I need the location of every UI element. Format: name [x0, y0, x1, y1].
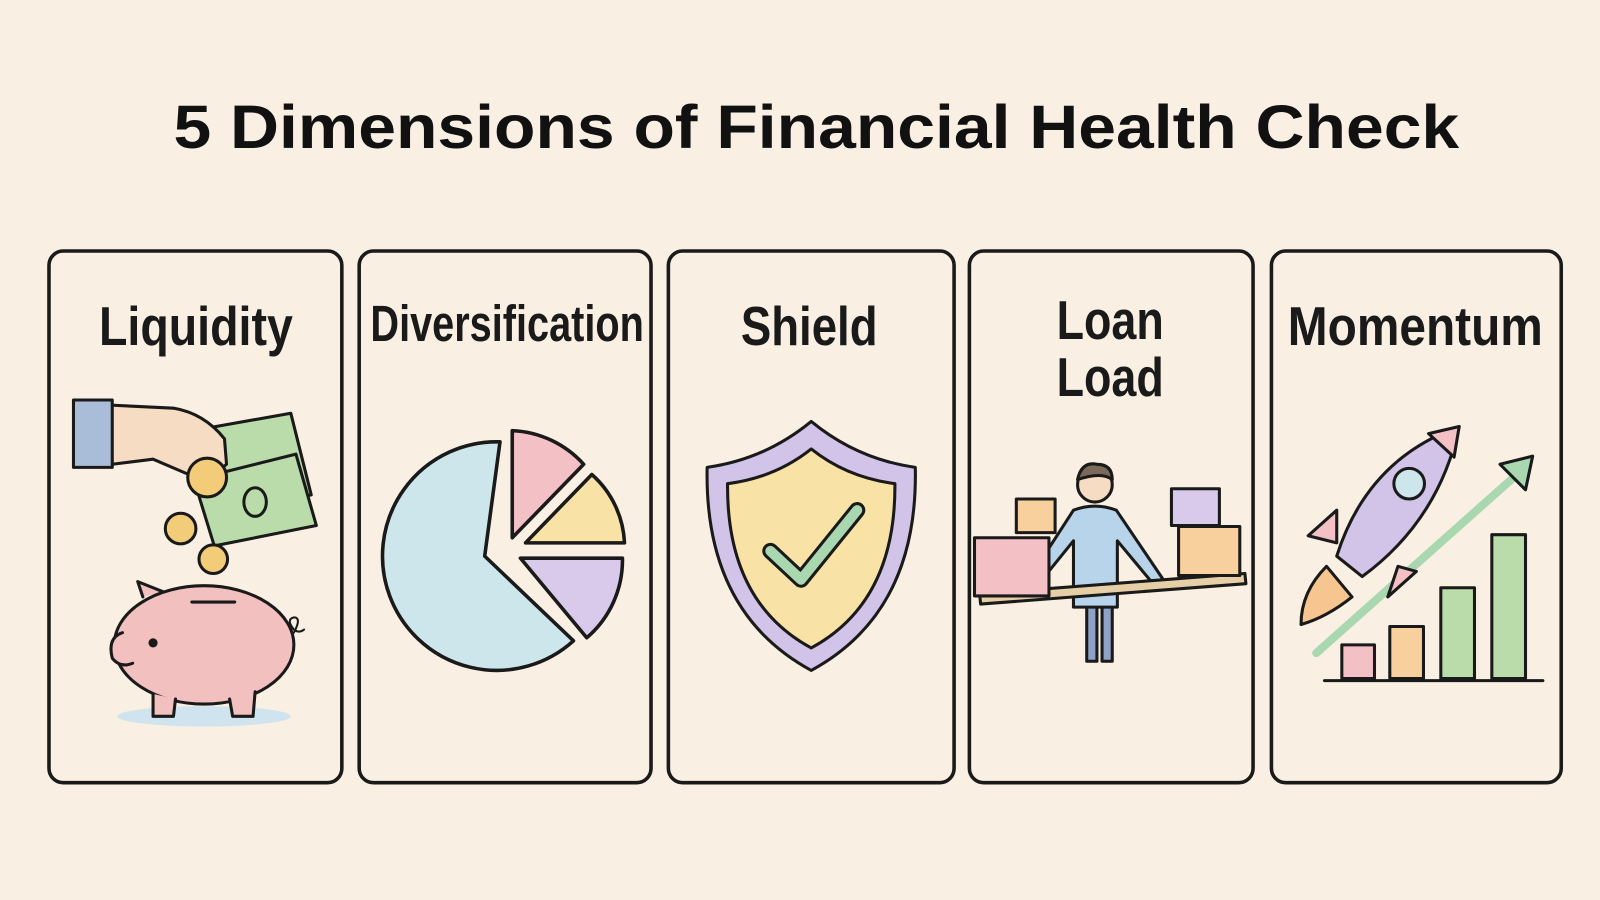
icon: person balancing boxes [974, 464, 1246, 661]
title: 5 Dimensions of Financial Health Check [173, 93, 1460, 161]
heading: loan load: Loan [1057, 289, 1164, 351]
icon: shield with check [707, 421, 915, 670]
panel: diversification [359, 251, 651, 783]
icon: rocket and growth chart [1301, 427, 1543, 681]
icon: pie chart [382, 431, 624, 670]
icon: hand, money and piggy bank [73, 400, 316, 727]
panel: momentum [1271, 251, 1561, 783]
panel: shield [668, 251, 954, 783]
heading: shield: Shield [741, 295, 878, 357]
panel: loan load [969, 251, 1253, 783]
heading: diversification: Diversification [370, 295, 644, 352]
heading: liquidity: Liquidity [99, 295, 293, 357]
panel: liquidity [49, 251, 342, 783]
heading: momentum: Momentum [1288, 295, 1543, 357]
panel: loan load: Load [1057, 346, 1164, 408]
